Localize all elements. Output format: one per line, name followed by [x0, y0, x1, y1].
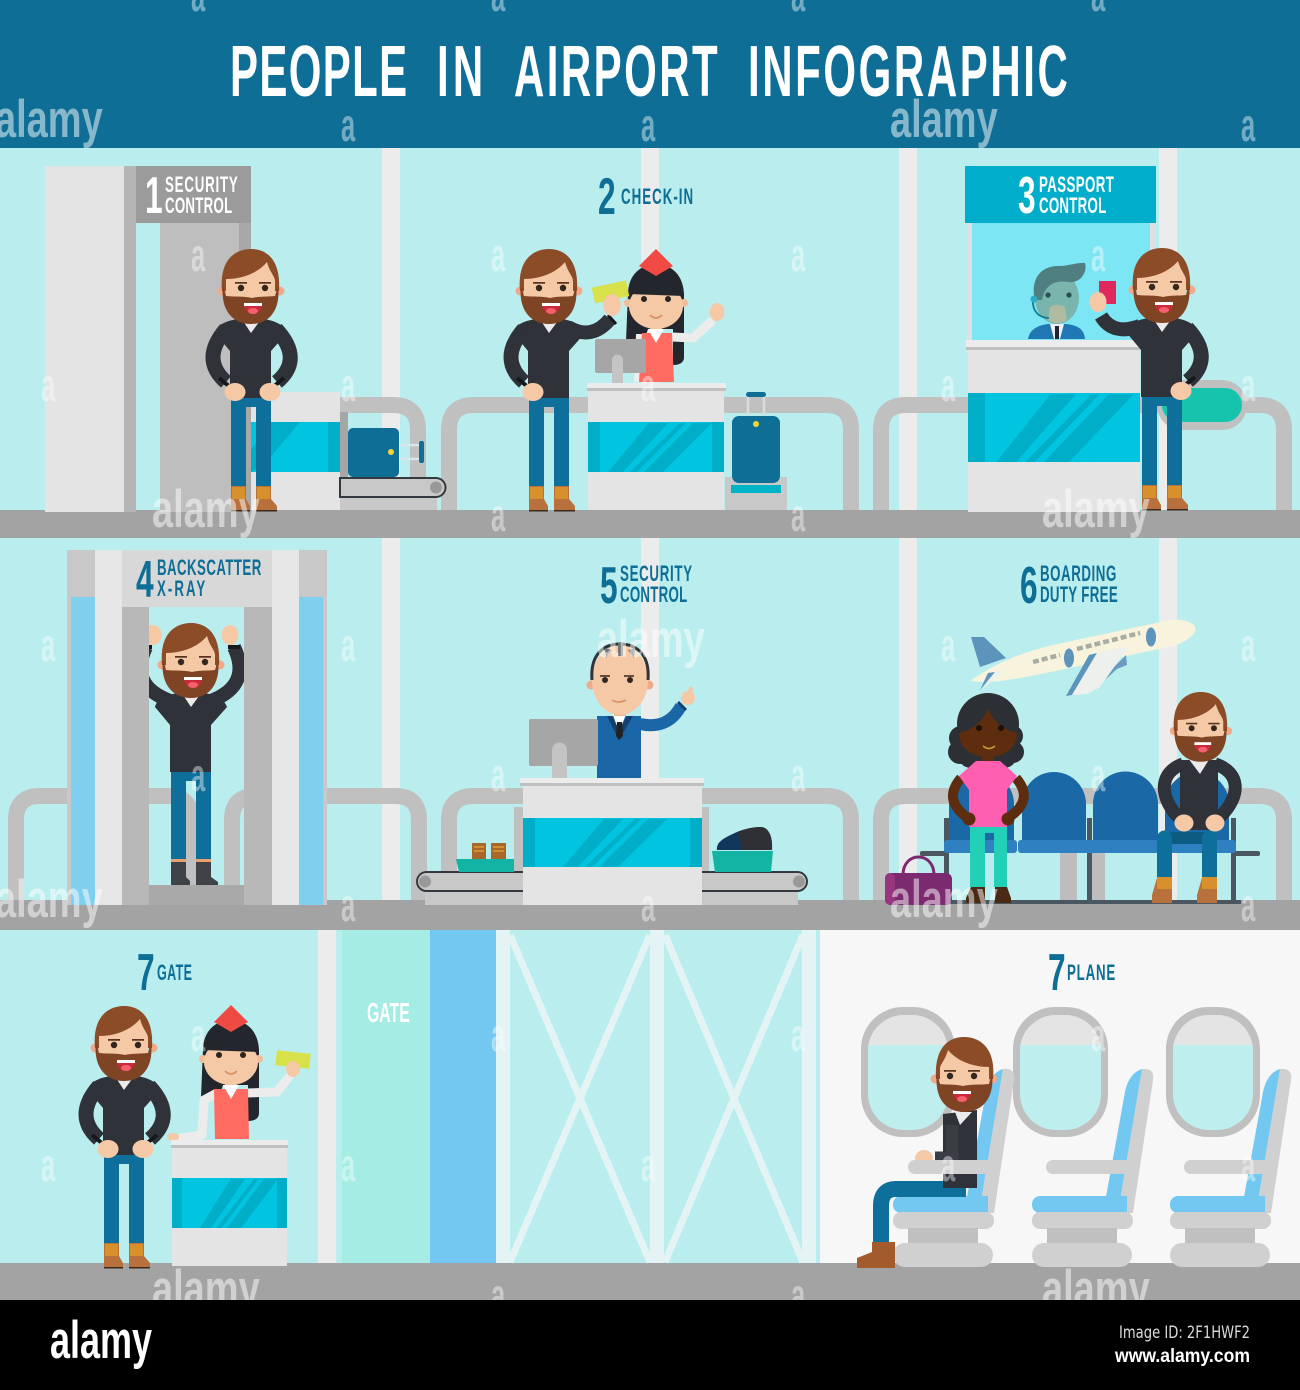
railings row 2 — [16, 796, 1284, 900]
window frame — [503, 930, 809, 1263]
gate door: GATE — [367, 997, 410, 1028]
small stock watermarks: a — [341, 99, 355, 151]
small stock watermarks: a — [791, 229, 805, 281]
gate door — [342, 930, 496, 1263]
small stock watermarks: a — [41, 359, 55, 411]
title: IN — [437, 32, 483, 112]
check-in desk — [587, 383, 726, 510]
woman passenger — [948, 693, 1024, 903]
small stock watermarks: a — [341, 359, 355, 411]
heading 5: SECURITY — [620, 560, 692, 586]
sign 1: CONTROL — [165, 192, 232, 218]
monitor — [529, 719, 598, 778]
small stock watermarks: a — [791, 1269, 805, 1321]
small stock watermarks: a — [791, 489, 805, 541]
sign 4: X-RAY — [157, 575, 205, 601]
small stock watermarks: a — [41, 619, 55, 671]
footer band — [0, 1300, 1300, 1390]
floors — [0, 510, 1300, 1300]
panel 6: boarding duty free — [885, 557, 1260, 905]
gate column — [318, 930, 336, 1263]
security officer — [586, 643, 695, 778]
small stock watermarks: a — [191, 1009, 205, 1061]
panel 3: passport control — [965, 166, 1247, 512]
small stock watermarks: a — [641, 359, 655, 411]
panel 1: security control — [45, 166, 446, 512]
passenger at gate — [86, 1006, 163, 1268]
passenger 4 arms raised — [140, 623, 240, 885]
heading 5: CONTROL — [620, 581, 687, 607]
conveyor with trays — [417, 807, 807, 905]
passenger 3 — [1090, 248, 1201, 510]
passport desk — [966, 340, 1140, 512]
x-ray posts — [122, 607, 272, 905]
large stock watermarks: alamy — [152, 480, 260, 538]
sign 3: PASSPORT — [1039, 171, 1114, 197]
small stock watermarks: a — [491, 1009, 505, 1061]
small stock watermarks: a — [341, 619, 355, 671]
sign 3: CONTROL — [1039, 192, 1106, 218]
footer band: alamy — [50, 1310, 152, 1370]
passenger 1 — [213, 249, 290, 512]
window columns — [382, 148, 1177, 900]
small stock watermarks: a — [641, 99, 655, 151]
large stock watermarks: alamy — [1042, 1260, 1150, 1318]
panel 5: security control — [417, 557, 807, 905]
small stock watermarks: a — [641, 1139, 655, 1191]
small stock watermarks: a — [491, 489, 505, 541]
title: INFOGRAPHIC — [748, 32, 1068, 112]
seat 1 — [893, 1069, 1014, 1267]
small stock watermarks: a — [1241, 359, 1255, 411]
panel 2: check-in — [511, 168, 787, 512]
small stock watermarks: a — [191, 229, 205, 281]
heading 6: DUTY FREE — [1040, 581, 1118, 607]
heading 5 — [600, 557, 692, 615]
small stock watermarks: a — [641, 879, 655, 931]
security desk — [520, 778, 704, 905]
panel 8: plane cabin — [820, 930, 1300, 1268]
small stock watermarks: a — [1091, 229, 1105, 281]
panel 7: gate — [86, 930, 809, 1268]
barrier cylinder — [1157, 380, 1247, 430]
airplane taking off — [967, 615, 1198, 696]
stewardess — [624, 249, 724, 382]
small stock watermarks: a — [1091, 1009, 1105, 1061]
x-ray scanner desk — [251, 392, 348, 510]
title — [230, 32, 1068, 112]
heading 2 — [598, 168, 693, 226]
heading 7 plane: 7 — [1048, 944, 1066, 1002]
small stock watermarks: a — [1241, 99, 1255, 151]
seat 3 — [1170, 1069, 1291, 1267]
footer band: www.alamy.com — [1114, 1346, 1250, 1367]
sign 1: 1 — [145, 167, 163, 225]
large stock watermarks — [0, 90, 1150, 1318]
sign 1 — [136, 166, 251, 225]
heading 2: CHECK-IN — [621, 183, 693, 209]
footer band: Image ID: 2F1HWF2 — [1119, 1323, 1250, 1343]
passport booklet — [1099, 281, 1116, 304]
small stock watermarks: a — [1241, 1139, 1255, 1191]
title: PEOPLE — [230, 32, 407, 112]
sign 3: 3 — [1018, 167, 1036, 225]
header band — [0, 0, 1300, 148]
travel bag — [885, 857, 952, 905]
suitcase on belt — [348, 428, 424, 477]
panel 4: backscatter x-ray — [67, 550, 327, 905]
small stock watermarks: a — [491, 1269, 505, 1321]
small stock watermarks: a — [41, 1139, 55, 1191]
small stock watermarks: a — [941, 619, 955, 671]
gate desk — [171, 1140, 288, 1266]
small stock watermarks: a — [941, 359, 955, 411]
small stock watermarks: a — [1091, 749, 1105, 801]
title: AIRPORT — [514, 32, 718, 112]
small stock watermarks: a — [491, 749, 505, 801]
stewardess at gate — [167, 1005, 311, 1141]
conveyor — [340, 478, 446, 510]
large stock watermarks: alamy — [1042, 480, 1150, 538]
sign 4 — [67, 550, 327, 609]
heading 6 — [1020, 557, 1118, 615]
luggage on scale — [725, 392, 787, 510]
small stock watermarks: a — [1241, 879, 1255, 931]
heading 6: 6 — [1020, 557, 1038, 615]
heading 7 plane: PLANE — [1067, 959, 1115, 985]
small stock watermarks: a — [1241, 619, 1255, 671]
heading 7 plane — [1048, 944, 1115, 1002]
large stock watermarks: alamy — [152, 1260, 260, 1318]
sign 3 — [965, 166, 1156, 225]
sign 1: SECURITY — [165, 171, 238, 197]
seated man — [1152, 692, 1235, 903]
small stock watermarks: a — [791, 749, 805, 801]
heading 7 gate — [137, 944, 192, 1002]
small stock watermarks: a — [341, 1139, 355, 1191]
large stock watermarks: alamy — [890, 870, 998, 928]
small stock watermarks: a — [341, 879, 355, 931]
sign 4: BACKSCATTER — [157, 554, 261, 580]
cabin windows — [861, 1007, 1260, 1137]
heading 7 gate: GATE — [157, 960, 192, 985]
waiting seats — [920, 772, 1260, 904]
heading 7 gate: 7 — [137, 944, 155, 1002]
seated passenger in plane — [857, 1037, 998, 1268]
large stock watermarks: alamy — [890, 90, 998, 148]
seat 2 — [1032, 1069, 1153, 1267]
heading 2: 2 — [598, 168, 616, 226]
railings row 1 — [340, 405, 1284, 510]
small stock watermarks: a — [941, 1139, 955, 1191]
booth window — [967, 223, 1156, 340]
heading 5: 5 — [600, 557, 618, 615]
sign 4: 4 — [136, 551, 154, 609]
small stock watermarks: a — [491, 229, 505, 281]
monitor — [595, 339, 646, 383]
heading 6: BOARDING — [1040, 560, 1116, 586]
large stock watermarks: alamy — [597, 610, 705, 668]
small stock watermarks: a — [791, 1009, 805, 1061]
small stock watermarks: a — [191, 749, 205, 801]
passenger 2 — [511, 249, 629, 512]
